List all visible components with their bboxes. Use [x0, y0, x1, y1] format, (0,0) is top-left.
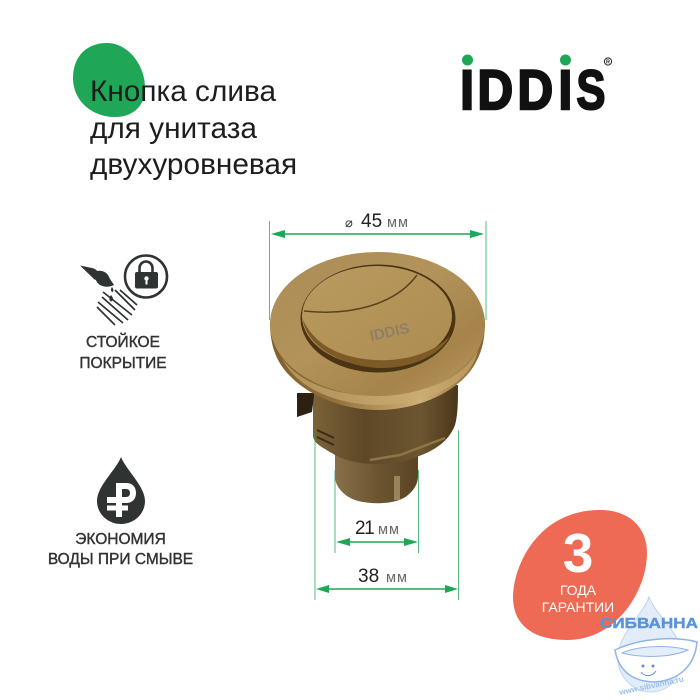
watermark: sibvanna: www.sibvanna.ru: [618, 675, 685, 697]
label: durable coating: [79, 333, 167, 372]
warranty badge: [513, 510, 647, 640]
dimension: 45 mm: 45: [361, 211, 382, 232]
dimension: 21 mm: мм: [378, 522, 400, 538]
dimension: 38 mm: 38: [358, 566, 379, 587]
lower body: [335, 445, 418, 503]
icon: water drop with ruble: [97, 457, 145, 524]
dimension: 21 mm: 21: [355, 518, 374, 539]
button split: [304, 275, 417, 312]
title: [90, 75, 297, 181]
dimension: 45 mm: [270, 211, 486, 320]
dimension: 38 mm: [315, 430, 458, 600]
warranty badge: ГОДА: [560, 582, 597, 598]
icon: lock in circle: [125, 256, 167, 298]
title: двухуровневая: [90, 148, 297, 181]
label: water saving: ЭКОНОМИЯ: [75, 531, 166, 548]
main body: [313, 385, 458, 464]
flange: [270, 322, 485, 410]
label: durable coating: ПОКРЫТИЕ: [79, 355, 167, 372]
dimension: 38 mm: мм: [386, 570, 408, 586]
title: для унитаза: [90, 112, 257, 145]
logo: IDDIS: IDDI: [460, 59, 572, 122]
green blob: [73, 43, 145, 117]
button recess: [300, 264, 456, 372]
dimension: 21 mm: [335, 470, 418, 553]
title: Кнопка слива: [90, 75, 276, 108]
button brand mark: IDDIS: [368, 320, 411, 345]
logo: IDDIS: S: [576, 59, 606, 121]
watermark: sibvanna: [600, 597, 698, 697]
icon: brush with droplets: [80, 266, 137, 325]
button face: [302, 266, 452, 366]
warranty badge: ГАРАНТИИ: [542, 599, 614, 615]
warranty badge: 3: [563, 522, 593, 584]
dimension: 45 mm: мм: [387, 215, 409, 231]
logo: IDDIS: [460, 54, 612, 122]
dimension: 45 mm: ⌀: [345, 215, 353, 230]
product photo: flush button: [270, 252, 485, 503]
side clip: [297, 393, 314, 417]
label: water saving: ВОДЫ ПРИ СМЫВЕ: [48, 551, 193, 568]
watermark: sibvanna: СИБВАННА: [600, 615, 698, 632]
label: water saving: [48, 531, 193, 568]
label: durable coating: СТОЙКОЕ: [86, 333, 160, 351]
logo: IDDIS: R: [606, 60, 610, 66]
